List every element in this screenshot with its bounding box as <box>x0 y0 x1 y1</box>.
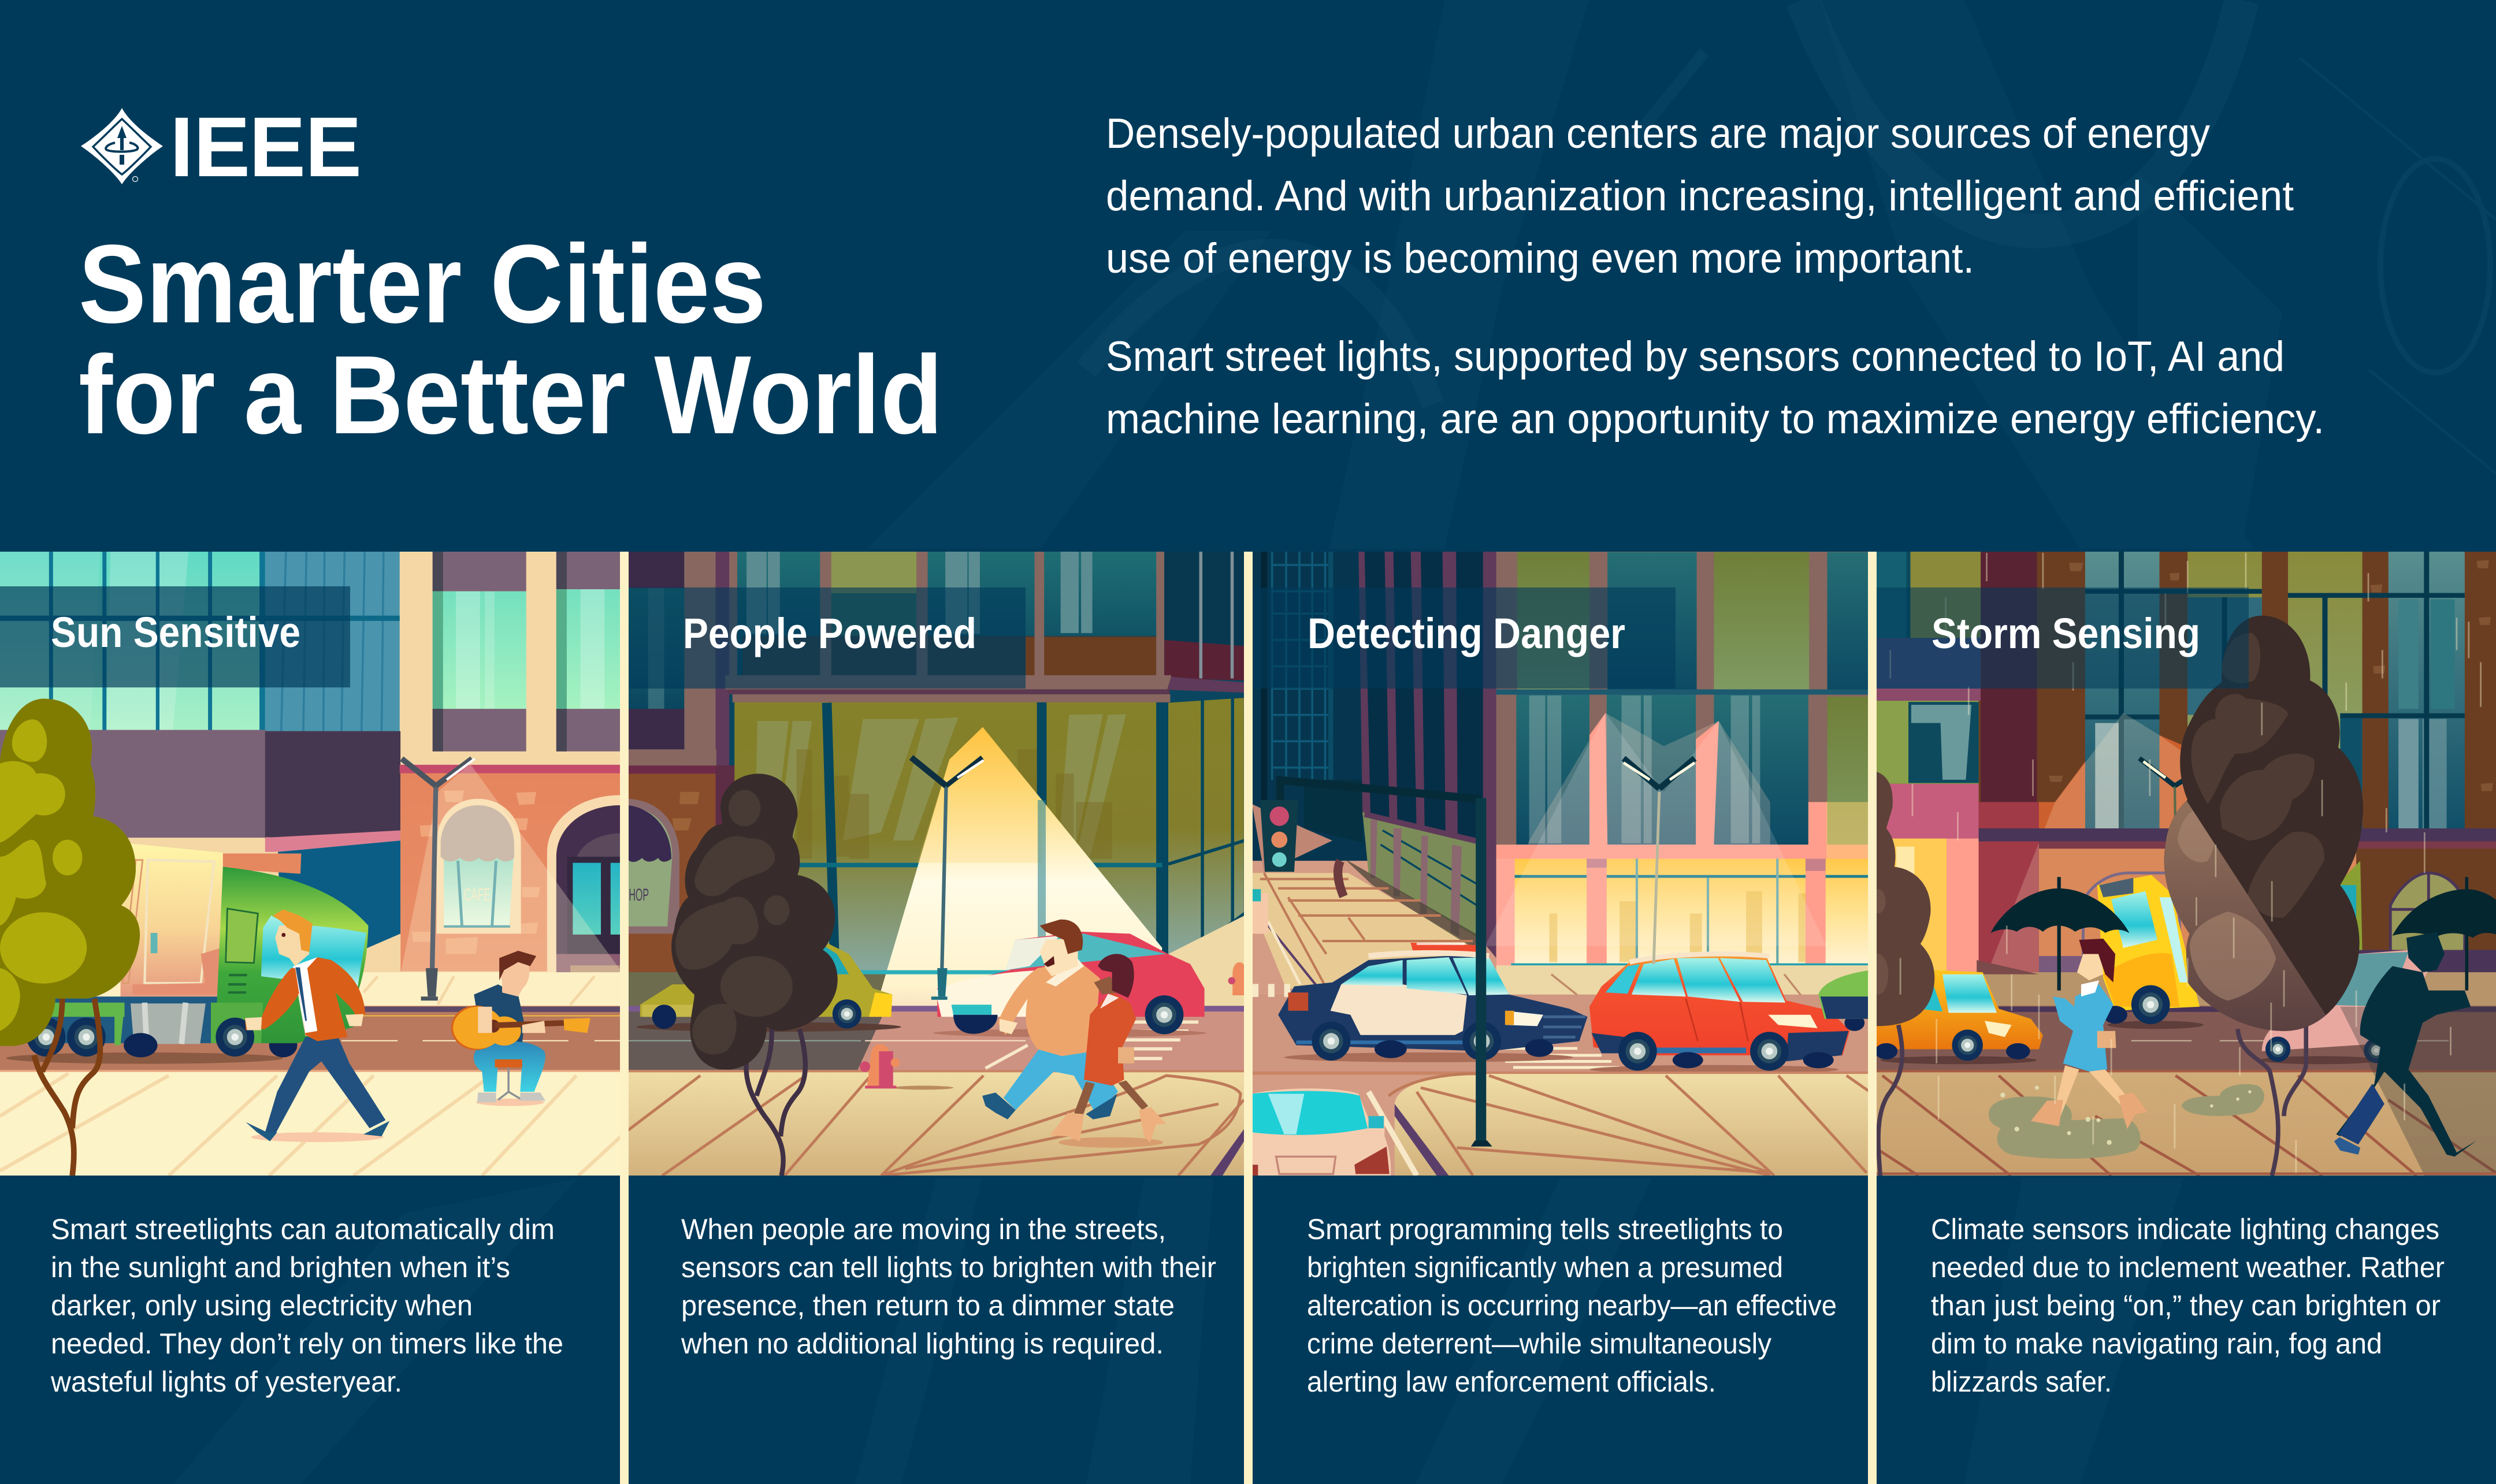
panel gutters <box>620 552 1877 1484</box>
caption: alerting law enforcement officials. <box>1307 1366 1716 1398</box>
car: green parked <box>1818 970 1870 1031</box>
car: red <box>933 932 1206 1037</box>
wordmark: IEEE <box>170 100 362 195</box>
illustration: daytime street: CAFE <box>464 884 491 905</box>
character: woman with umbrella <box>1991 877 2148 1129</box>
caption: Smart streetlights can automatically dim <box>51 1213 555 1245</box>
panel: detecting danger <box>1248 549 1878 1398</box>
panel: storm sensing <box>1866 549 2496 1398</box>
caption: darker, only using electricity when <box>51 1289 473 1322</box>
icon: double street lamp <box>1624 758 1695 964</box>
rain streaks <box>1890 553 2481 1173</box>
vehicle: yellow bus <box>2097 875 2204 1029</box>
intro text: use of energy is becoming even more important. <box>1106 235 1974 282</box>
character: silhouette with umbrella <box>2334 877 2496 1156</box>
icon: small left tree <box>1868 772 1934 1176</box>
icon: tree silhouette <box>671 773 838 1176</box>
label band <box>1253 587 1676 689</box>
caption: brighten significantly when a presumed <box>1307 1251 1783 1284</box>
caption <box>1307 1213 1837 1398</box>
character: walking man <box>245 909 389 1141</box>
intro text: demand. And with urbanization increasing, intelligent and efficient <box>1106 173 2294 220</box>
intro text: Densely-populated urban centers are major sources of energy <box>1106 110 2210 157</box>
puddles <box>1989 1084 2264 1159</box>
label band: Detecting Danger <box>1308 609 1625 657</box>
icon: traffic light <box>1260 778 1492 1147</box>
caption <box>50 1213 563 1398</box>
intro text: machine learning, are an opportunity to maximize energy efficiency. <box>1106 396 2324 442</box>
title: Smarter Cities <box>79 221 766 346</box>
vehicle: taxi <box>1875 970 2043 1064</box>
caption: blizzards safer. <box>1931 1366 2112 1398</box>
caption: needed. They don’t rely on timers like the <box>51 1327 563 1360</box>
label band <box>629 587 1026 689</box>
caption: needed due to inclement weather. Rather <box>1931 1251 2445 1284</box>
title <box>79 221 943 457</box>
label band <box>0 586 350 687</box>
caption: Climate sensors indicate lighting changes <box>1931 1213 2439 1245</box>
caption: crime deterrent—while simultaneously <box>1307 1327 1771 1360</box>
car: yellow <box>636 938 901 1032</box>
icon: street lamp <box>2140 758 2187 832</box>
illustration: night street with pedestrians <box>624 549 1254 1181</box>
caption: wasteful lights of yesteryear. <box>50 1366 402 1398</box>
caption: dim to make navigating rain, fog and <box>1931 1327 2382 1360</box>
IEEE logo <box>81 100 362 195</box>
caption: than just being “on,” they can brighten or <box>1931 1289 2441 1322</box>
label band <box>1877 587 2249 689</box>
caption: altercation is occurring nearby—an effective <box>1307 1289 1837 1322</box>
icon: fire hydrant <box>860 962 1245 1090</box>
vehicle: pale car <box>2260 950 2428 1064</box>
label band: People Powered <box>683 609 976 657</box>
character: guitar player <box>451 951 590 1102</box>
intro text <box>1106 110 2324 442</box>
illustration: daytime street <box>0 549 630 1181</box>
icon: street lamp <box>911 757 983 1000</box>
label band: Storm Sensing <box>1932 609 2200 657</box>
icon: large tree <box>2164 616 2363 1176</box>
caption <box>681 1213 1216 1360</box>
panel: sun sensitive <box>0 549 630 1398</box>
title: for a Better World <box>79 332 943 457</box>
intro text: Smart street lights, supported by sensors connected to IoT, AI and <box>1106 333 2285 380</box>
label band: Sun Sensitive <box>51 608 300 656</box>
caption: when no additional lighting is required. <box>681 1327 1164 1360</box>
icon: tree <box>0 699 140 1046</box>
caption: in the sunlight and brighten when it’s <box>51 1251 510 1284</box>
illustration: police at night <box>1248 549 1878 1181</box>
icon: IEEE diamond <box>81 108 163 184</box>
caption: When people are moving in the streets, <box>681 1213 1166 1245</box>
caption: presence, then return to a dimmer state <box>681 1289 1175 1322</box>
car: police <box>1278 943 1587 1062</box>
caption: Smart programming tells streetlights to <box>1307 1213 1783 1245</box>
icon: street lamp <box>402 758 475 1001</box>
caption: sensors can tell lights to brighten with their <box>681 1251 1216 1284</box>
car: foreground white <box>1252 1088 1391 1176</box>
car: red hatchback <box>1589 954 1849 1074</box>
characters: couple walking <box>982 920 1167 1148</box>
caption <box>1931 1213 2445 1398</box>
panel: people powered <box>624 549 1254 1360</box>
illustration: night street with pedestrians: HOP <box>629 886 649 905</box>
illustration: rainy street <box>1866 549 2496 1181</box>
